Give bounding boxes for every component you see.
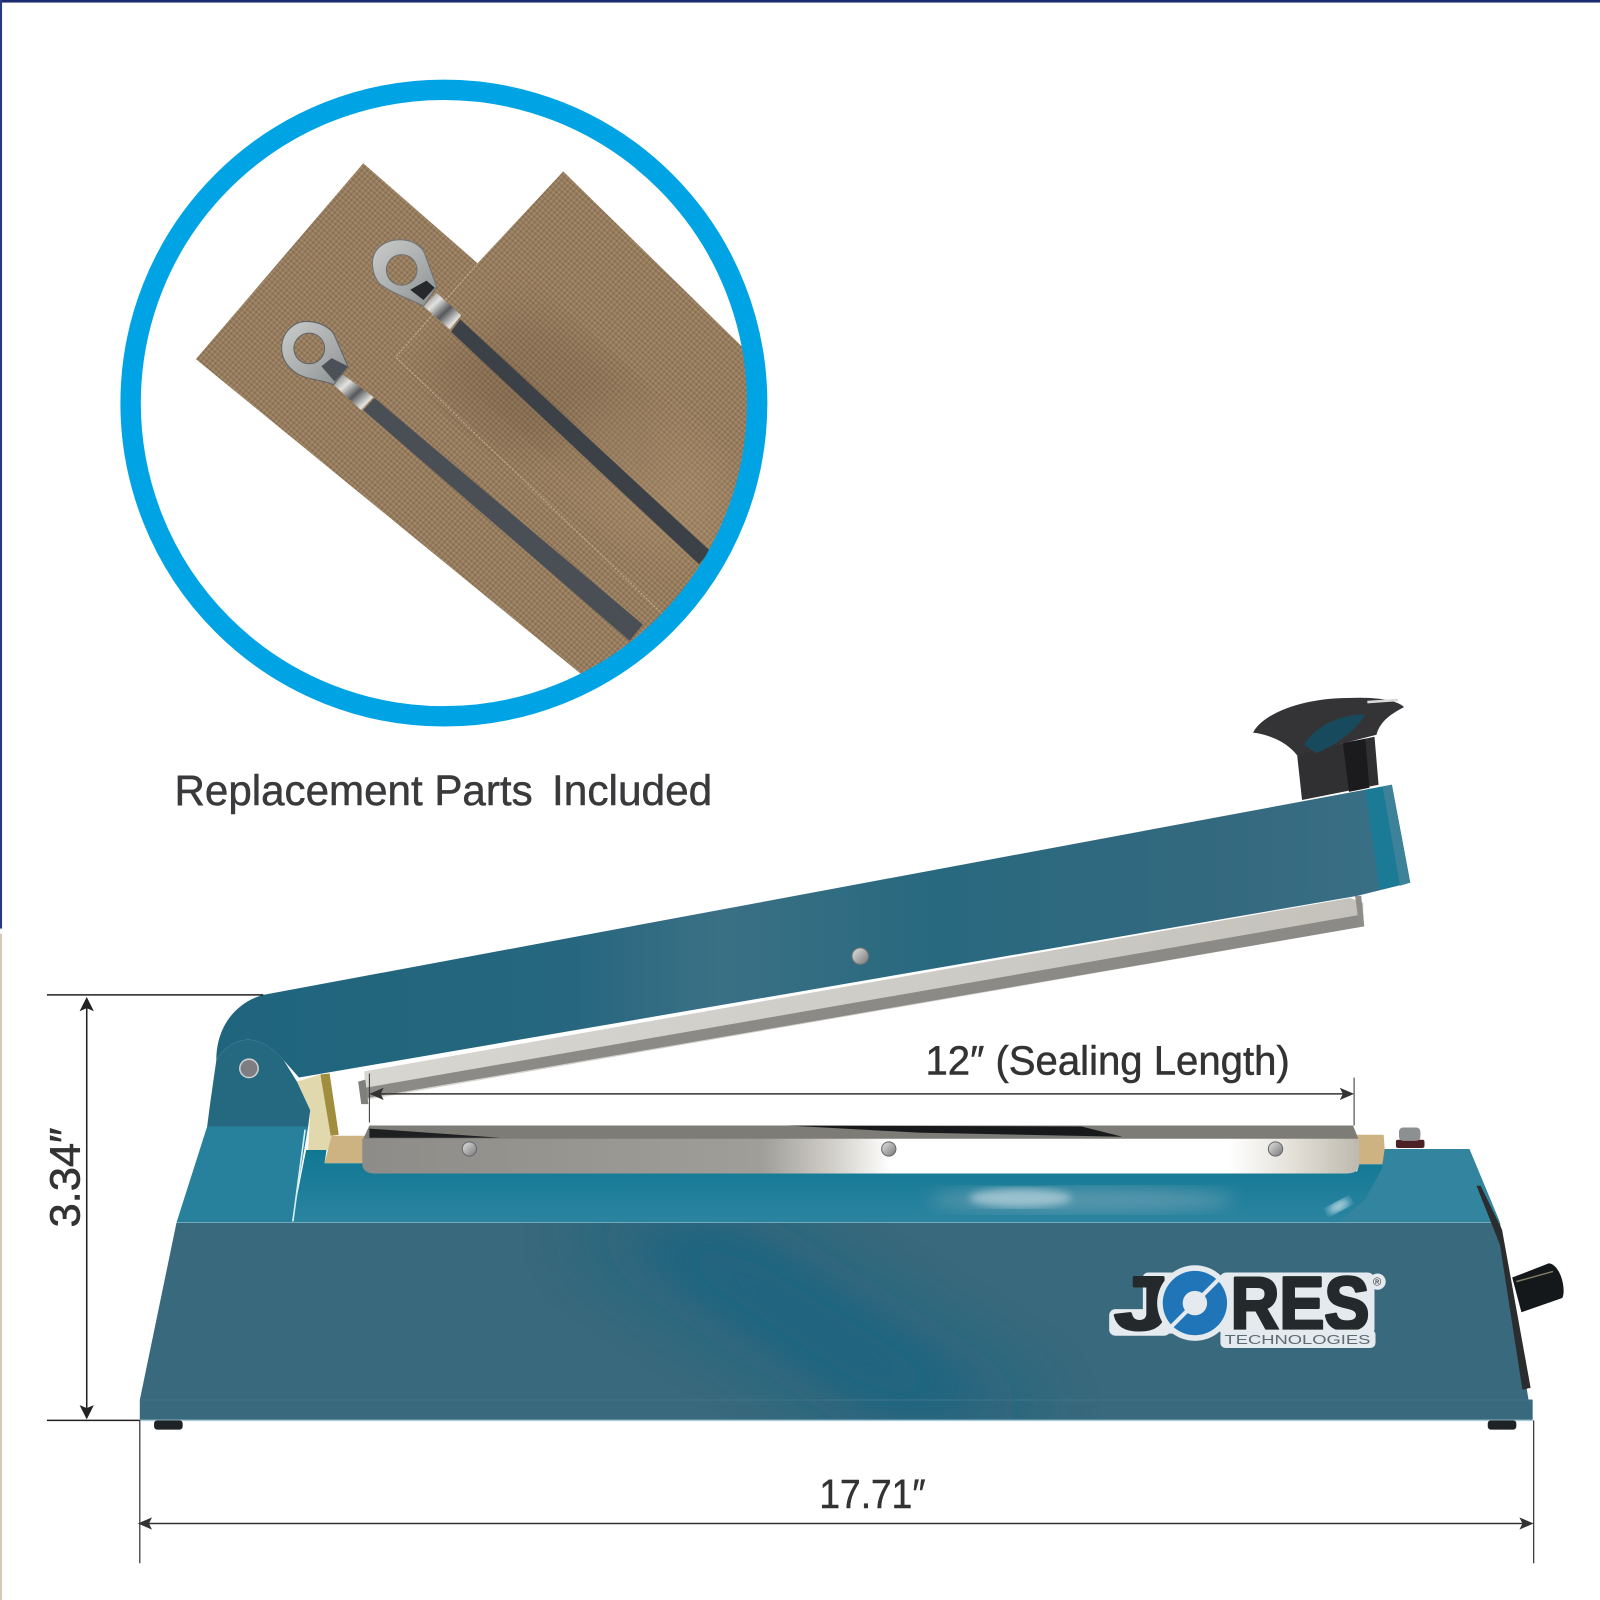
logo disc (1157, 1265, 1233, 1341)
dimension: height 3.34 in: 3.34″ (42, 1128, 90, 1228)
dimension: sealing length 12 in: 12″ (Sealing Length) (926, 1037, 1290, 1083)
caption: replacement parts (174, 767, 712, 815)
heating wire: lower (282, 321, 643, 641)
terminal screw (1396, 1128, 1424, 1148)
pivot pin (240, 1059, 258, 1078)
base edge highlights (140, 1222, 1533, 1420)
arm pin (852, 948, 868, 964)
logo wordmark (1114, 1263, 1369, 1347)
caption: replacement parts: Replacement Parts (174, 767, 533, 815)
caption: replacement parts: Included (552, 767, 712, 815)
logo wordmark: RES (1231, 1263, 1369, 1347)
logo subtitle (1220, 1330, 1376, 1348)
panel: replacement parts circle (120, 80, 768, 726)
rubber feet (154, 1420, 1516, 1430)
upper arm (216, 785, 1410, 1078)
base top face (177, 1127, 1500, 1222)
cork pads and upright bracket (297, 1073, 1386, 1164)
heating wire: upper (372, 240, 710, 564)
dimension: width 17.71 in: 17.71″ (819, 1471, 926, 1517)
dimension: sealing length 12 in (369, 1037, 1354, 1126)
base front face (140, 1222, 1533, 1420)
lower sealing jaw (362, 1126, 1359, 1173)
handle knob (1253, 698, 1404, 800)
arm end cap (1365, 785, 1410, 890)
dimension: width 17.71 in (138, 1420, 1534, 1563)
jaw screws (462, 1142, 1283, 1156)
photo: heat-resistant fabric sheets (196, 163, 747, 674)
logo backing (1109, 1272, 1386, 1336)
logo wordmark: J (1114, 1263, 1169, 1347)
impulse sealer machine (140, 698, 1564, 1430)
blue circle ring (131, 90, 757, 716)
registered mark: ® (1373, 1277, 1382, 1289)
dimension: height 3.34 in (42, 995, 263, 1420)
brand logo (1109, 1263, 1386, 1348)
control panel and timer knob (1477, 1186, 1564, 1390)
pivot bracket (207, 1040, 310, 1127)
upper sealing bar (358, 896, 1364, 1104)
logo subtitle: TECHNOLOGIES (1224, 1332, 1371, 1347)
